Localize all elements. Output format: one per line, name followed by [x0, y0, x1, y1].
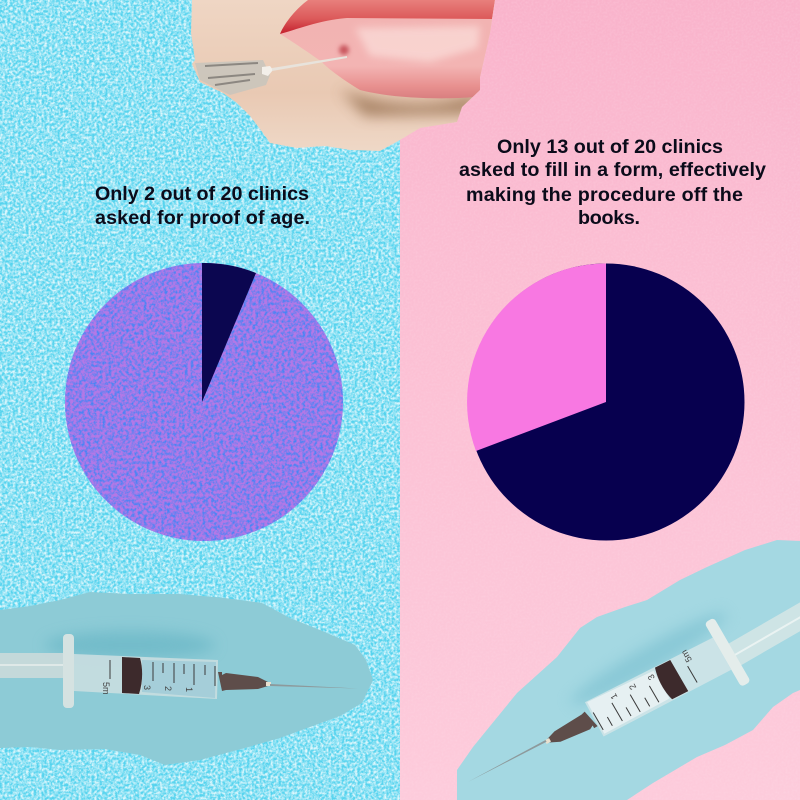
- heading: right statistic: Only 13 out of 20 clinics: [497, 136, 723, 158]
- heading: right statistic: making the procedure off the: [466, 184, 743, 206]
- syringe numerals: 3: [142, 685, 152, 690]
- icon: right syringe: [454, 543, 800, 800]
- syringe numerals: 5m: [101, 682, 111, 695]
- syringe numerals: [607, 648, 694, 705]
- photo: lips with injection: [185, 0, 505, 155]
- needle hub: [195, 56, 347, 95]
- heading: right statistic: books.: [578, 207, 640, 229]
- syringe numerals: 2: [163, 686, 173, 691]
- left teal torn paper: [0, 592, 373, 765]
- lower lip: [280, 18, 495, 98]
- heading: right statistic: [459, 136, 766, 229]
- lip dimple: [339, 45, 349, 55]
- syringe numerals: 1: [184, 687, 194, 692]
- pie chart: proof of age: [60, 258, 350, 548]
- panel: pink background: [400, 0, 800, 800]
- icon: left syringe: [0, 631, 358, 708]
- heading: left statistic: Only 2 out of 20 clinics: [95, 183, 309, 205]
- heading: left statistic: asked for proof of age.: [95, 207, 310, 229]
- panel: blue background: [0, 0, 400, 800]
- syringe numerals: 1: [608, 692, 620, 701]
- syringe numerals: [101, 682, 194, 695]
- heading: left statistic: [95, 183, 310, 229]
- chin shadow: [340, 90, 480, 116]
- pie slice: no form: [467, 263, 606, 451]
- upper lip: [280, 0, 495, 34]
- syringe numerals: 2: [627, 682, 638, 692]
- lip highlight: [355, 26, 480, 62]
- syringe numerals: 5m: [679, 648, 694, 664]
- heading: right statistic: asked to fill in a form, effectively: [459, 159, 766, 181]
- pie slice: asked for proof: [202, 263, 256, 402]
- pie chart: filled in a form: [467, 263, 744, 540]
- right teal torn paper: [457, 540, 800, 800]
- syringe numerals: 3: [646, 673, 657, 682]
